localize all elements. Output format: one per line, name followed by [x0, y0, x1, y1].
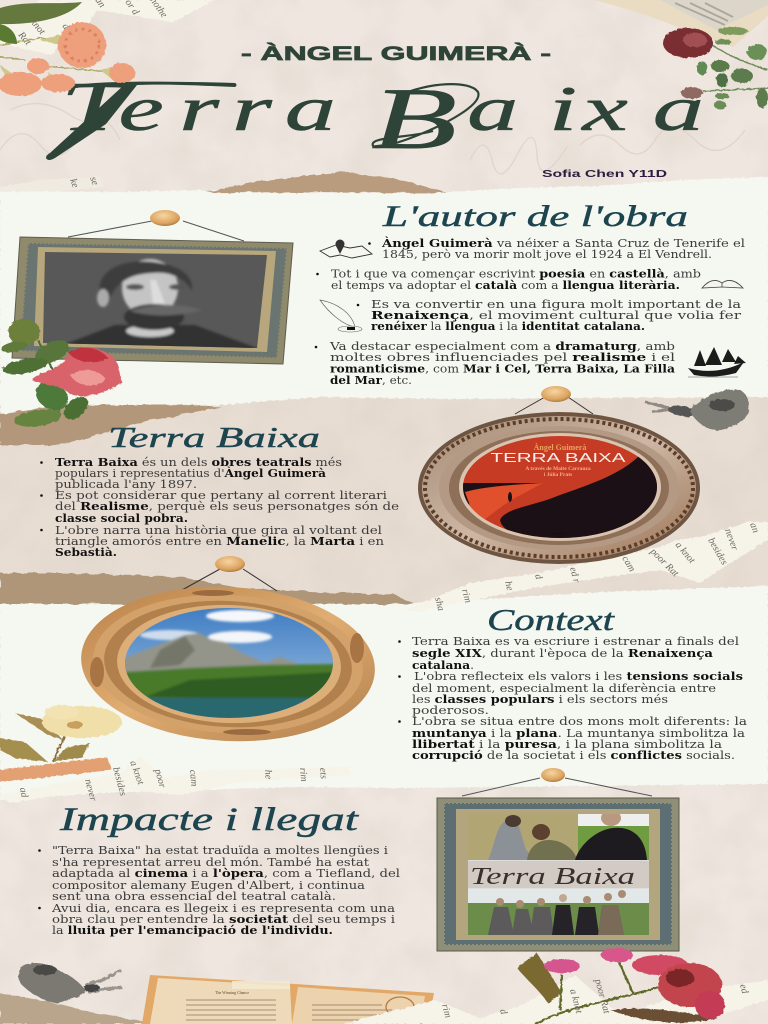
title: Terra Baixa: aixa	[467, 74, 704, 144]
icon: sailing ship	[688, 347, 746, 377]
paper strip: bottom: d	[497, 1008, 509, 1017]
text: Terra Baixa points: triangle amorós entre en Manelic , la Marta i en	[55, 535, 384, 548]
icon: map with pin	[320, 240, 372, 258]
heading: Context: Context	[487, 602, 616, 637]
icon: open book	[702, 280, 743, 288]
paper strip: bottom: a knot	[567, 988, 584, 1015]
paper strip: section two: never	[722, 527, 740, 552]
text: Terra Baixa points: publicada l'any 1897.	[55, 478, 197, 491]
title: Terra Baixa: B	[371, 70, 457, 167]
icon: quill and ink	[320, 300, 362, 332]
paper strip: section two: besides	[705, 536, 730, 567]
text: Context points: del moment, especialment la diferència entre	[412, 682, 716, 695]
torn brown stripe	[0, 573, 415, 604]
text: author point four	[315, 340, 676, 387]
decoration: open book bottom: The Winning Chance	[215, 990, 249, 995]
text: Impacte points: Avui dia, encara es llegeix i es representa com una	[51, 902, 396, 915]
paper strip: top left: Rat	[15, 29, 33, 48]
frame: book cover oval: TERRA BAIXA	[490, 450, 626, 465]
title: Terra Baixa: T	[61, 69, 130, 146]
text: author point three: Es va convertir en una figura molt important de la	[371, 298, 742, 311]
text: Terra Baixa points	[40, 456, 399, 559]
frame: book cover oval: A través de Maite Carranza	[525, 466, 591, 472]
paper strip: section two: d	[532, 573, 544, 582]
decoration: pink pressed flower	[517, 948, 725, 1024]
decoration: open book top right	[595, 0, 768, 47]
paper strip: bottom: ed	[737, 983, 750, 996]
paper strip: lower left: never	[82, 778, 99, 802]
text: Impacte points: compositor alemany Eugen d'Albert, i continua	[52, 879, 366, 892]
paper strip: bottom: poor Rat	[592, 977, 612, 1015]
text: author point four: romanticisme , com Mar i Cel, Terra Baixa, La Filla	[330, 362, 675, 376]
panel: author band	[0, 177, 768, 415]
text: author point four: moltes obres influenciades pel realisme i el	[330, 351, 676, 364]
text: Context points: corrupció de la societat i els conflictes socials.	[412, 749, 735, 762]
paper strip: section two: he	[502, 580, 515, 592]
decoration: red rose and leaves	[663, 27, 768, 109]
paper strip: bottom	[343, 975, 768, 1024]
paper strip: lower title: se	[87, 175, 101, 187]
paper strip: lower left: rim	[297, 767, 309, 782]
frame: book cover oval	[418, 386, 700, 564]
title: Terra Baixa: erra	[118, 74, 336, 144]
text: author point three: renéixer la llengua i la identitat catalana.	[371, 320, 645, 333]
paper strip: section two	[405, 521, 768, 612]
heading: Terra Baixa section: Terra Baixa	[108, 422, 320, 454]
torn brown patch top	[205, 172, 447, 193]
text: Terra Baixa points: L'obre narra una història que gira al voltant del	[55, 524, 383, 537]
frame: book cover oval: CENDRA	[551, 532, 566, 536]
paper strip: section two: cam	[619, 554, 637, 574]
text: author point four: del Mar , etc.	[330, 374, 412, 387]
text: Context points: les classes populars i els sectors més	[412, 693, 668, 706]
decoration: pressed cream flower	[0, 705, 122, 762]
frame: book cover oval: i Júlia Prats	[544, 472, 572, 478]
frame: landscape oval	[77, 556, 379, 749]
paper strip: top left	[0, 0, 215, 55]
frame: theatre adaptation photo: Terra Baixa	[470, 864, 635, 890]
paper strip: lower left: besides	[110, 766, 128, 797]
torn brown patch bottom	[0, 993, 157, 1024]
paper strip: top left: de	[60, 21, 74, 36]
paper strip: section two: sha	[432, 596, 446, 612]
text: Impacte points: sent una obra essencial del teatral català.	[52, 890, 336, 903]
text: Context points: L'obra se situa entre dos mons molt diferents: la	[412, 715, 748, 728]
text: author point one: 1845, però va morir molt jove el 1924 a El Vendrell.	[382, 248, 712, 261]
heading: Impacte i llegat: Impacte i llegat	[59, 802, 359, 838]
text: Terra Baixa points: del Realisme , perquè els seus personatges són de	[55, 500, 399, 513]
text: Terra Baixa points: Sebastià.	[55, 546, 117, 559]
paper strip: bottom: rim	[439, 1003, 453, 1019]
paper strip: lower left: ad	[17, 787, 30, 799]
paper strip: section two: a knot	[673, 540, 697, 566]
text: Context points: poderosos.	[412, 704, 489, 717]
text: Terra Baixa points: Terra Baixa és un dels obres teatrals més	[55, 456, 342, 469]
paper strip: lower title	[0, 175, 104, 192]
text: Impacte points: s'ha representat arreu del món. També ha estat	[52, 856, 370, 869]
text: author point three	[357, 298, 742, 333]
heading: author name: - ÀNGEL GUIMERÀ -	[241, 43, 551, 65]
title: Terra Baixa	[46, 69, 704, 167]
text: Context points: Terra Baixa es va escriure i estrenar a finals del	[412, 635, 740, 648]
text: author point two: el temps va adoptar el català com a llengua literària.	[331, 279, 680, 292]
text: Context points: muntanya i la plana . La muntanya simbolitza la	[412, 727, 746, 740]
text: Impacte points: adaptada al cinema i a l'òpera , com a Tiefland, del	[52, 867, 401, 880]
paper strip: lower left	[0, 757, 350, 803]
text: Context points: catalana .	[412, 659, 474, 672]
paper strip: lower left: poor	[152, 767, 168, 789]
paper strip: lower left: ets	[317, 767, 329, 779]
text: Context points: llibertat i la puresa , i la plana simbolitza la	[412, 738, 723, 751]
paper strip: section two: an	[747, 521, 761, 534]
text: Terra Baixa points: classe social pobra.	[55, 512, 188, 525]
text: Context points	[398, 635, 748, 762]
title ghost handwriting	[0, 100, 745, 174]
paper strip: top left: knot	[28, 17, 47, 37]
paper strip: lower title: ke	[67, 177, 81, 190]
heading: L'autor de l'obra: L'autor de l'obra	[381, 200, 688, 233]
text: Impacte points: obra clau per entendre la societat del seu temps i	[52, 913, 396, 926]
paper strip: section two: rim	[459, 588, 473, 604]
text: author point two	[316, 268, 701, 292]
text: author point four: Va destacar especialment com a dramaturg , amb	[329, 340, 675, 353]
text: author point two: Tot i que va començar escrivint poesia en castellà , amb	[331, 268, 701, 280]
paper strip: section two: ed r	[567, 566, 582, 584]
decoration: orange tape	[0, 757, 112, 782]
text: Terra Baixa points: populars i representatius d' Àngel Guimerà	[55, 466, 326, 480]
decoration: open book bottom	[142, 975, 434, 1024]
text: author point three: Renaixença , el moviment cultural que volia fer	[371, 309, 742, 322]
decoration: orange flowers	[0, 22, 135, 96]
text: Context points: L'obra reflecteix els valors i les tensions socials	[414, 670, 743, 683]
text: Context points: segle XIX , durant l'època de la Renaixença	[412, 647, 713, 660]
text: Impacte points: "Terra Baixa" ha estat traduïda a moltes llengües i	[52, 844, 389, 857]
paper strip: lower left: a knot	[127, 759, 146, 786]
beige band: Terra Baixa section	[0, 395, 768, 610]
text: Impacte points: la lluita per l'emancipació de l'individu.	[52, 924, 333, 937]
text: author point one: Àngel Guimerà va néixer a Santa Cruz de Tenerife el	[381, 236, 746, 250]
decoration: moth top	[645, 390, 749, 430]
frame: book cover oval: Àngel Guimerà	[534, 442, 586, 452]
paper strip: lower left: cam	[187, 769, 199, 787]
text: author point one	[368, 236, 746, 261]
paper strip: lower left: he	[262, 769, 274, 780]
frame: portrait of author	[12, 210, 293, 364]
decoration: moth bottom	[18, 963, 122, 1003]
frame: theatre adaptation photo	[437, 768, 679, 951]
decoration: pink rose	[0, 319, 122, 429]
text: Impacte points	[38, 844, 401, 937]
paper strip: section two: poor Rat	[647, 546, 681, 579]
panel: context band	[0, 586, 768, 800]
byline: Sofia Chen Y11D	[542, 168, 668, 180]
text: Terra Baixa points: Es pot considerar que pertany al corrent literari	[55, 489, 388, 502]
decoration: top left leaves	[0, 2, 82, 44]
torn brown patch left	[0, 405, 222, 445]
